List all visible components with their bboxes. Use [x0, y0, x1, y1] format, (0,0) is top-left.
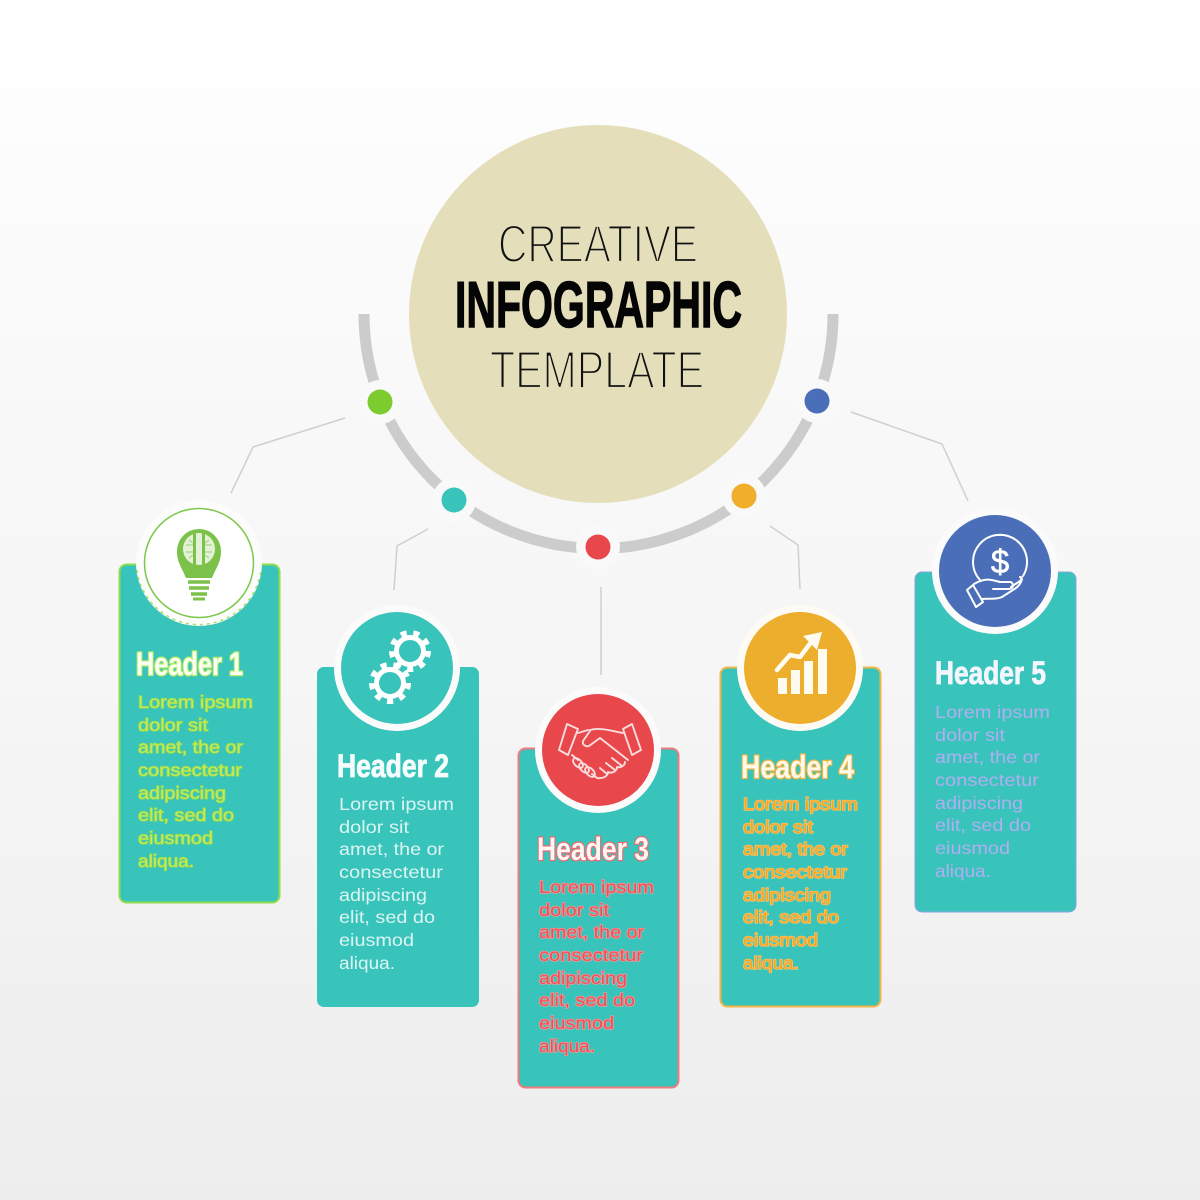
body text: adipiscing: [539, 968, 627, 988]
panel: header 5: [915, 508, 1076, 912]
heading: Header 2: [337, 748, 449, 784]
icon badge: light bulb: [136, 500, 262, 626]
body text: consectetur: [743, 862, 847, 882]
body text: adipiscing: [935, 793, 1023, 813]
body text: elit, sed do: [339, 907, 435, 927]
title line: template: TEMPLATE: [490, 341, 704, 400]
body text: aliqua.: [743, 953, 799, 973]
arc node: teal: [432, 478, 476, 522]
icon badge: handshake: [535, 687, 661, 813]
connector 4: [770, 526, 800, 589]
arc node: orange: [722, 474, 766, 518]
semicircular arc: [364, 314, 833, 548]
heading: Header 5: [935, 655, 1046, 691]
arc node: blue: [795, 379, 839, 423]
icon badge: money in hand: [932, 508, 1058, 634]
icon badge: gears: [334, 605, 460, 731]
body text: [935, 702, 1050, 881]
body text: eiusmod: [138, 828, 213, 848]
connector 5: [851, 412, 968, 501]
body text: [539, 877, 654, 1056]
body text: amet, the or: [935, 747, 1040, 767]
body text: aliqua.: [339, 953, 395, 973]
body text: eiusmod: [339, 930, 414, 950]
body text: [743, 794, 858, 973]
body text: dolor sit: [743, 817, 813, 837]
dollar sign: $: [991, 543, 1009, 580]
body text: amet, the or: [339, 839, 444, 859]
body text: adipiscing: [339, 885, 427, 905]
body text: dolor sit: [138, 715, 208, 735]
body text: adipiscing: [743, 885, 831, 905]
heading: Header 3: [537, 831, 649, 867]
title line: creative: CREATIVE: [498, 215, 698, 274]
body text: aliqua.: [935, 861, 991, 881]
body text: adipiscing: [138, 783, 226, 803]
panel: header 3: [518, 687, 678, 1088]
body text: Lorem ipsum: [743, 794, 858, 814]
body text: dolor sit: [339, 817, 409, 837]
panel: header 2: [317, 605, 479, 1007]
panel: header 1: [120, 500, 280, 902]
body text: elit, sed do: [539, 990, 635, 1010]
arc node: red: [576, 525, 620, 569]
body text: eiusmod: [539, 1013, 614, 1033]
connector 2: [394, 529, 428, 590]
body text: amet, the or: [138, 737, 243, 757]
body text: amet, the or: [743, 839, 848, 859]
body text: eiusmod: [743, 930, 818, 950]
body text: Lorem ipsum: [339, 794, 454, 814]
body text: consectetur: [539, 945, 643, 965]
body text: elit, sed do: [743, 907, 839, 927]
heading: Header 1: [136, 646, 243, 682]
connector 3: [600, 587, 602, 675]
panel: header 4: [720, 605, 880, 1006]
body text: amet, the or: [539, 922, 644, 942]
body text: [339, 794, 454, 973]
body text: dolor sit: [539, 900, 609, 920]
body text: Lorem ipsum: [935, 702, 1050, 722]
body text: dolor sit: [935, 725, 1005, 745]
icon badge: growth chart: [737, 605, 863, 731]
title line: infographic: INFOGRAPHIC: [455, 268, 742, 341]
heading: Header 4: [741, 749, 854, 785]
body text: consectetur: [138, 760, 242, 780]
body text: elit, sed do: [935, 815, 1031, 835]
body text: consectetur: [935, 770, 1039, 790]
central title circle: [409, 125, 787, 503]
arc node: green: [358, 380, 402, 424]
body text: eiusmod: [935, 838, 1010, 858]
body text: Lorem ipsum: [138, 692, 253, 712]
body text: [138, 692, 253, 871]
body text: Lorem ipsum: [539, 877, 654, 897]
body text: aliqua.: [539, 1036, 595, 1056]
connector 1: [231, 418, 345, 493]
body text: aliqua.: [138, 851, 194, 871]
body text: consectetur: [339, 862, 443, 882]
body text: elit, sed do: [138, 805, 234, 825]
